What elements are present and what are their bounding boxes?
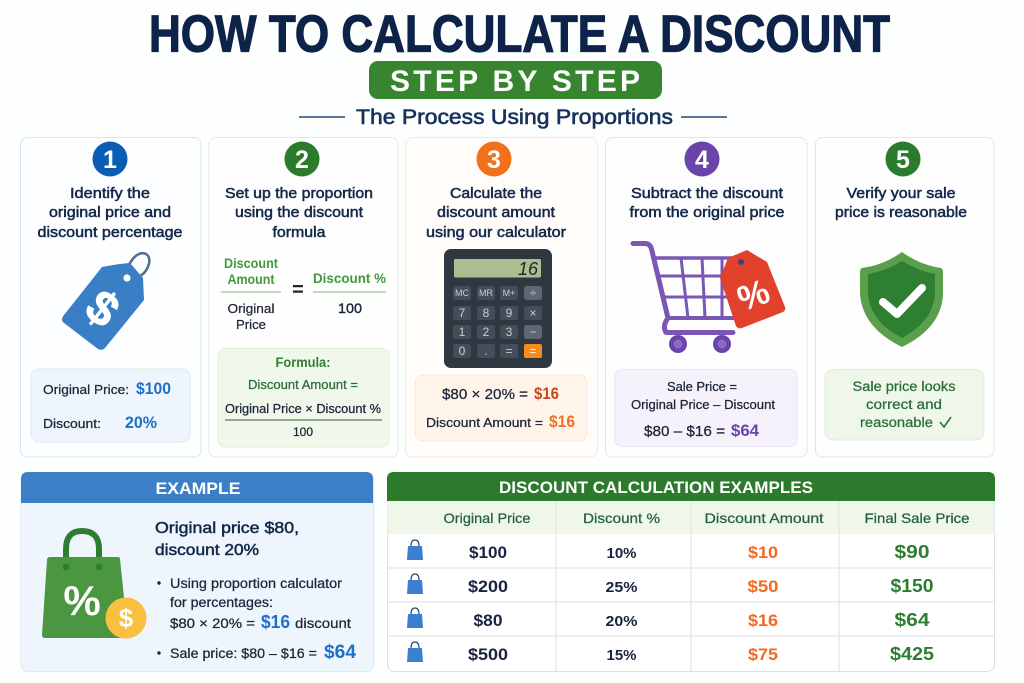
note: verification: reasonable xyxy=(860,415,933,430)
heading: step 1 xyxy=(38,186,182,241)
example bullets: Using proportion calculator xyxy=(170,576,343,591)
heading: step 1: Identify the xyxy=(70,186,150,202)
heading: step 4: Subtract the discount xyxy=(631,186,783,202)
panel: step 1 xyxy=(20,138,201,457)
note: sale price: $80 – $16 = xyxy=(644,423,725,440)
note: original price and discount: 20% xyxy=(125,413,157,432)
step number 1: 1 xyxy=(103,146,117,174)
example header: EXAMPLE xyxy=(156,479,240,498)
heading: step 5: price is reasonable xyxy=(835,205,967,221)
step number 2 xyxy=(284,142,320,176)
row: $200: 25% xyxy=(606,579,638,596)
icon: price tag xyxy=(62,253,149,350)
example bullets: $16 xyxy=(261,612,290,632)
icon: shopping cart with percent tag: % xyxy=(732,272,775,319)
icon: calculator: 16 xyxy=(518,259,539,279)
note: discount amount: $16 xyxy=(549,412,575,431)
icon: calculator: ÷ xyxy=(530,286,537,300)
proportion fractions: Price xyxy=(236,317,266,332)
note: original price and discount: Discount: xyxy=(43,416,101,431)
heading: step 2: formula xyxy=(272,225,327,241)
heading: step 2: using the discount xyxy=(235,205,363,221)
row: $200: $200 xyxy=(468,578,508,596)
row: $200: $50 xyxy=(748,578,778,596)
icon: shopping bag with coin: % xyxy=(63,577,101,624)
row: $80 xyxy=(407,608,930,630)
example heading xyxy=(155,520,299,559)
example bullets: $64 xyxy=(324,642,356,663)
note: sale price xyxy=(615,370,797,446)
heading: step 2 xyxy=(225,186,373,241)
proportion fractions: Discount % xyxy=(313,271,386,286)
step number 1 xyxy=(92,142,128,176)
icon: shopping bag with coin xyxy=(42,531,146,638)
note: sale price: Original Price – Discount xyxy=(631,398,776,412)
icon: calculator: 8 xyxy=(483,306,490,320)
icon: shopping cart with percent tag xyxy=(633,244,785,353)
step number 2: 2 xyxy=(295,146,309,174)
icon: calculator: . xyxy=(484,344,488,358)
row: $100: 10% xyxy=(606,545,636,562)
panel: step 2 xyxy=(209,138,398,457)
proportion fractions: Amount xyxy=(228,272,275,287)
step number 3 xyxy=(476,142,512,176)
note: discount amount: Discount Amount = xyxy=(426,415,543,430)
icon: price tag: $ xyxy=(75,280,129,338)
row: $500 xyxy=(407,642,934,664)
icon: calculator: 9 xyxy=(506,306,513,320)
row: $100: $90 xyxy=(894,541,930,562)
proportion fractions: Discount xyxy=(224,256,278,271)
heading: step 1: original price and xyxy=(49,205,171,221)
table column headers xyxy=(388,501,994,534)
icon: calculator: M+ xyxy=(503,288,515,298)
icon: calculator: = xyxy=(529,344,537,358)
row: $100: $10 xyxy=(748,544,778,562)
heading: step 1: discount percentage xyxy=(38,225,182,241)
heading: step 4: from the original price xyxy=(630,205,784,221)
table title bar xyxy=(387,472,995,501)
note: formula: Original Price × Discount % xyxy=(225,402,381,416)
icon: shopping bag with coin: $ xyxy=(119,603,134,633)
row: $500: $500 xyxy=(468,646,508,664)
panel: step 5 xyxy=(816,138,994,457)
row: $500: $425 xyxy=(890,643,934,664)
icon: calculator xyxy=(444,249,552,368)
panel: step 3 xyxy=(406,138,598,457)
example bullets: for percentages: xyxy=(170,595,273,610)
row: $80: $80 xyxy=(474,612,502,630)
note: original price and discount: Original Price: xyxy=(43,382,129,397)
note: verification xyxy=(825,370,984,440)
row: $100 xyxy=(407,540,930,562)
example header xyxy=(21,472,373,503)
icon: calculator: MC xyxy=(455,288,469,298)
icon: calculator: 0 xyxy=(459,344,466,358)
example bullets: discount xyxy=(295,616,351,631)
note: verification: correct and xyxy=(866,397,942,412)
table column headers: Discount % xyxy=(583,510,660,526)
example bullets: $80 × 20% = xyxy=(170,616,255,631)
icon: calculator: 1 xyxy=(459,325,466,339)
note: discount amount: $80 × 20% = xyxy=(442,386,528,403)
example bullets xyxy=(157,576,356,663)
table title bar: DISCOUNT CALCULATION EXAMPLES xyxy=(499,478,813,497)
note: formula: Formula: xyxy=(276,355,330,370)
note: discount amount xyxy=(415,375,587,441)
example heading: Original price $80, xyxy=(155,520,299,537)
note: discount amount: $16 xyxy=(534,384,559,403)
proportion fractions: = xyxy=(292,279,304,301)
row: $80: $16 xyxy=(748,612,778,630)
heading: step 3: discount amount xyxy=(437,205,555,221)
note: sale price: Sale Price = xyxy=(667,380,737,394)
example bullets: Sale price: $80 – $16 = xyxy=(170,646,317,661)
icon: calculator: − xyxy=(529,325,537,339)
table column headers: Discount Amount xyxy=(704,510,824,526)
step number 5 xyxy=(886,142,920,176)
heading: step 2: Set up the proportion xyxy=(225,186,373,202)
heading: step 5 xyxy=(835,186,967,221)
row: $500: $75 xyxy=(748,646,778,664)
note: sale price: $64 xyxy=(731,421,760,440)
table column headers: Final Sale Price xyxy=(864,510,970,526)
heading: step 3 xyxy=(426,186,566,241)
heading: step 4 xyxy=(630,186,784,221)
heading: step 5: Verify your sale xyxy=(846,186,956,202)
row: $200 xyxy=(407,574,934,596)
step number 4 xyxy=(684,142,720,176)
proportion fractions: 100 xyxy=(338,300,362,316)
panel: example xyxy=(21,472,374,672)
proportion fractions: Original xyxy=(228,301,275,316)
note: verification: Sale price looks xyxy=(852,379,956,394)
note: original price and discount xyxy=(31,369,190,442)
step number 3: 3 xyxy=(487,146,501,174)
step number 4: 4 xyxy=(695,146,709,174)
row: $80: 20% xyxy=(606,613,638,630)
heading: step 3: using our calculator xyxy=(426,225,566,241)
icon: calculator: × xyxy=(529,306,537,320)
proportion fractions xyxy=(221,256,386,332)
table column headers: Original Price xyxy=(444,510,531,526)
row: $80: $64 xyxy=(894,609,930,630)
heading: step 3: Calculate the xyxy=(450,186,542,202)
note: formula: 100 xyxy=(293,425,313,439)
icon: calculator: 3 xyxy=(506,325,513,339)
badge: step by step: STEP BY STEP xyxy=(390,65,640,98)
table: discount calculation examples xyxy=(387,472,995,672)
icon: shield with check xyxy=(860,252,943,347)
note: original price and discount: $100 xyxy=(136,379,171,398)
note: formula: Discount Amount = xyxy=(248,378,358,392)
icon: calculator: = xyxy=(505,344,513,358)
subtitle: The Process Using Proportions xyxy=(356,106,673,129)
note: formula xyxy=(218,348,389,447)
icon: calculator: 2 xyxy=(483,325,490,339)
step number 5: 5 xyxy=(896,146,910,174)
row: $100: $100 xyxy=(469,544,507,562)
row: $200: $150 xyxy=(890,575,934,596)
title: HOW TO CALCULATE A DISCOUNT xyxy=(149,6,890,64)
icon: calculator: 7 xyxy=(459,306,466,320)
row: $500: 15% xyxy=(606,647,636,664)
example heading: discount 20% xyxy=(155,542,259,559)
panel: step 4 xyxy=(606,138,807,457)
icon: calculator: MR xyxy=(479,288,493,298)
